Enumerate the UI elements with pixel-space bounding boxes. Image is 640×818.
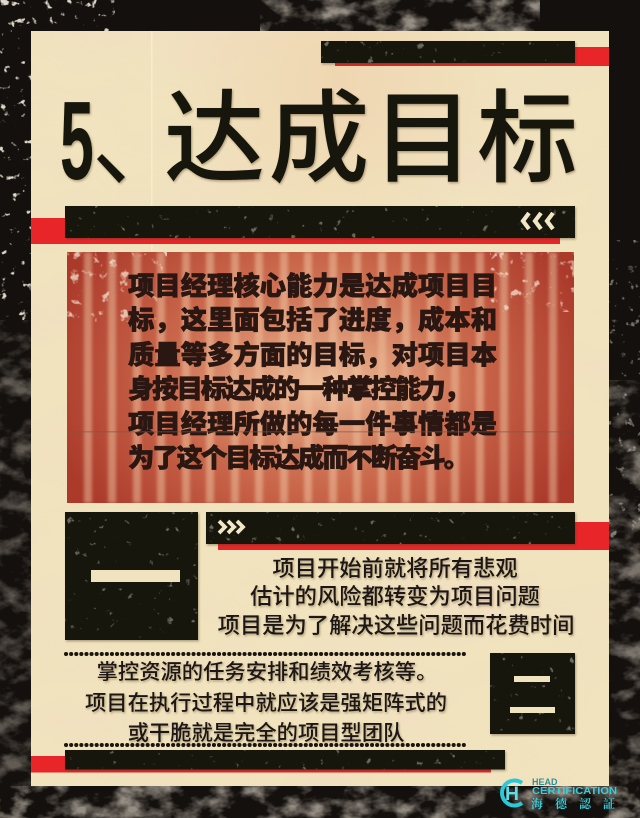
logo: head certification <box>502 777 617 812</box>
text: section two: 或干脆就是完全的项目型团队 <box>128 721 404 745</box>
logo text: HEAD <box>532 777 558 787</box>
block: number two <box>490 653 575 734</box>
text: section two <box>85 660 447 745</box>
icon: right chevrons <box>219 521 243 533</box>
bottom bar <box>31 750 505 772</box>
logo text: 海德認証 <box>531 795 615 812</box>
title comma <box>97 154 125 183</box>
text: section one: 项目开始前就将所有悲观 <box>272 556 518 581</box>
top bar <box>321 41 609 66</box>
section one bar <box>206 512 609 550</box>
dotted divider top <box>66 652 468 656</box>
panel: red intro <box>67 252 574 503</box>
icon: left chevrons <box>523 213 553 229</box>
intro paragraph: 项目经理所做的每一件事情都是 <box>128 409 497 439</box>
intro paragraph: 为了这个目标达成而不断奋斗。 <box>128 443 470 473</box>
logo text <box>531 777 617 812</box>
icon: logo ring: H <box>505 784 519 805</box>
text: section two: 掌控资源的任务安排和绩效考核等。 <box>97 660 437 684</box>
text: section one: 项目是为了解决这些问题而花费时间 <box>218 613 574 638</box>
block: number one <box>65 512 198 640</box>
text: section one <box>218 556 574 638</box>
middle bar <box>31 206 575 244</box>
text: section two: 项目在执行过程中就应该是强矩阵式的 <box>85 691 447 715</box>
title <box>60 58 578 204</box>
logo text: CERTIFICATION <box>532 785 617 797</box>
intro paragraph <box>128 271 497 473</box>
title text: 达成目标 <box>164 58 578 204</box>
title number: 5 <box>60 80 94 204</box>
intro paragraph: 身按目标达成的一种掌控能力， <box>128 374 470 404</box>
text: section one: 估计的风险都转变为项目问题 <box>250 584 540 609</box>
panel stripes <box>84 252 557 503</box>
intro paragraph: 项目经理核心能力是达成项目目 <box>128 271 497 301</box>
intro paragraph: 质量等多方面的目标，对项目本 <box>128 340 497 370</box>
intro paragraph: 标，这里面包括了进度，成本和 <box>128 305 497 335</box>
dotted divider bottom <box>66 743 468 747</box>
